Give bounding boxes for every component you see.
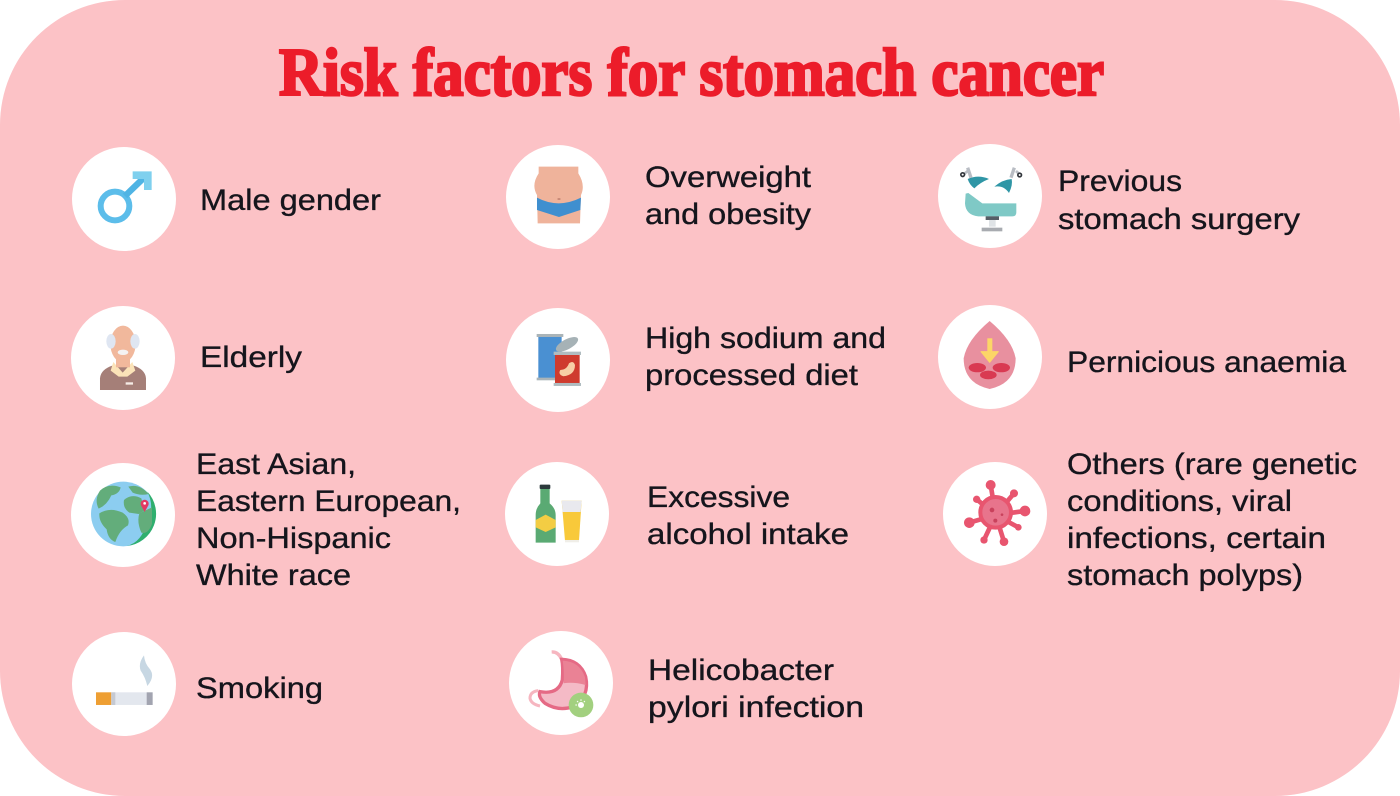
label: others: infections, certain <box>1067 522 1326 555</box>
item: elderly <box>71 306 302 410</box>
label: ethnicity: Non-Hispanic <box>196 522 391 555</box>
icon: cigarette <box>96 655 153 705</box>
label: stomach surgery: Previous <box>1058 165 1182 198</box>
label: others: Others (rare genetic <box>1067 448 1357 481</box>
label: alcohol: Excessive <box>647 481 790 514</box>
label: alcohol: alcohol intake <box>647 518 849 551</box>
icon: operating table and lamps <box>960 168 1022 231</box>
item: others <box>943 448 1357 592</box>
label: others <box>1067 448 1357 592</box>
label: ethnicity: East Asian, <box>196 448 356 481</box>
icon: belly <box>534 167 583 223</box>
label: others: conditions, viral <box>1067 485 1292 518</box>
icon: elderly man <box>100 326 146 390</box>
label: helicobacter <box>648 654 864 724</box>
label: sodium diet: High sodium and <box>645 322 886 355</box>
item: ethnicity <box>71 448 461 592</box>
title: Risk factors for stomach cancer <box>279 34 1104 110</box>
icon: virus <box>964 480 1030 546</box>
label: sodium diet <box>645 322 886 392</box>
label: helicobacter: Helicobacter <box>648 654 834 687</box>
label: stomach surgery: stomach surgery <box>1058 203 1300 236</box>
label: pernicious anaemia: Pernicious anaemia <box>1067 346 1346 379</box>
label: overweight: Overweight <box>645 161 812 194</box>
label: ethnicity <box>196 448 461 592</box>
icon: male symbol <box>101 171 152 220</box>
label: stomach surgery <box>1058 165 1300 236</box>
item: smoking <box>72 632 323 736</box>
item: stomach surgery <box>938 144 1300 248</box>
label: alcohol <box>647 481 849 551</box>
label: ethnicity: Eastern European, <box>196 485 461 518</box>
label: overweight <box>645 161 812 231</box>
label: others: stomach polyps) <box>1067 559 1303 592</box>
item: alcohol <box>505 462 849 566</box>
icon: globe with pin <box>91 482 156 546</box>
icon: cans <box>537 334 581 386</box>
label: male gender: Male gender <box>200 184 381 217</box>
label: smoking: Smoking <box>196 672 323 705</box>
label: sodium diet: processed diet <box>645 359 859 392</box>
label: ethnicity: White race <box>196 559 351 592</box>
item: helicobacter <box>509 631 864 735</box>
label: helicobacter: pylori infection <box>648 691 864 724</box>
label: overweight: and obesity <box>645 198 811 231</box>
icon: stomach with bacterium <box>530 652 593 717</box>
item: sodium diet <box>506 308 886 412</box>
label: elderly: Elderly <box>200 341 302 374</box>
item: pernicious anaemia <box>938 305 1346 409</box>
item: overweight <box>506 145 812 249</box>
icon: beer bottle and glass <box>536 485 582 543</box>
item: male gender <box>72 147 381 251</box>
icon: blood drop <box>964 321 1016 389</box>
